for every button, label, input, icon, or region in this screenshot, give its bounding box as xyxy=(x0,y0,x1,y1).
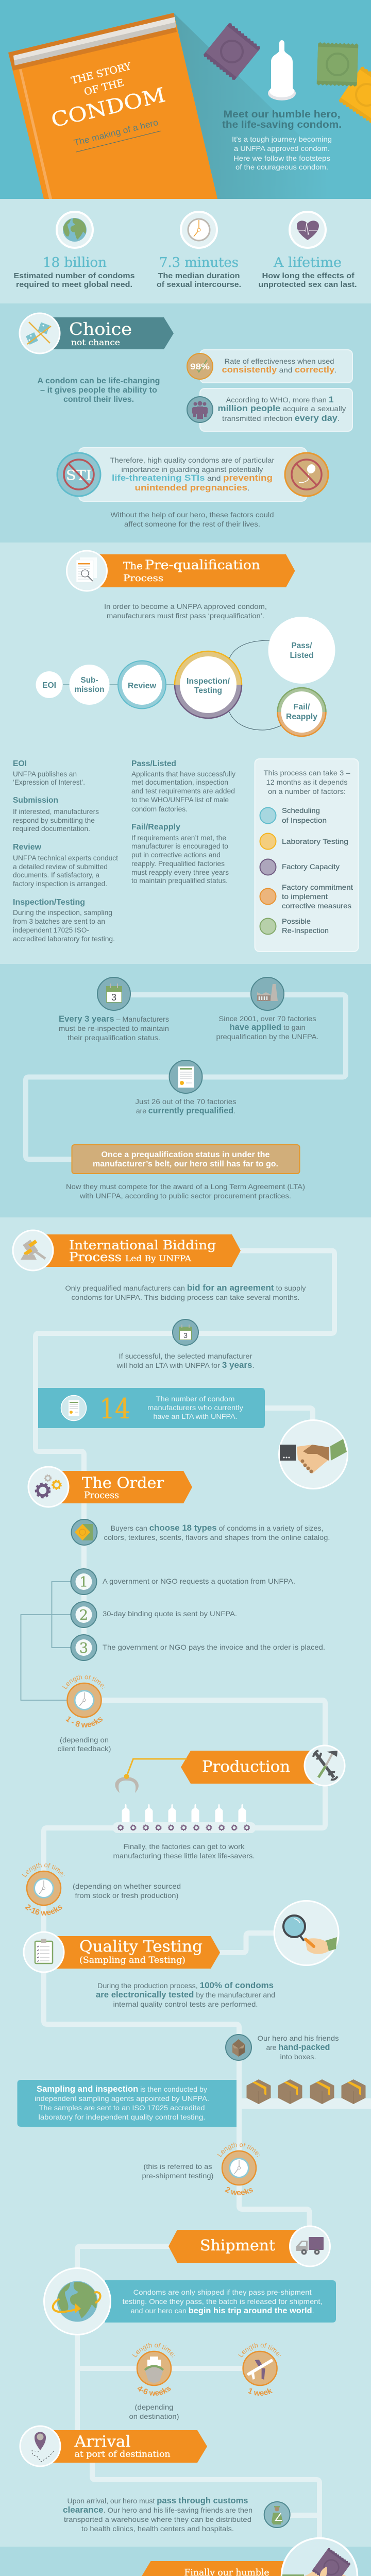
text: customs clearance: to health clinics, health centers and hospitals. xyxy=(81,2524,234,2533)
section background: hero xyxy=(0,0,371,199)
text: hand-packed: into boxes. xyxy=(280,2053,316,2061)
hero intro text: a UNFPA approved condom. xyxy=(234,144,330,152)
text: 3 years LTA: will hold an LTA with UNFPA for 3 years. xyxy=(116,1361,255,1370)
text: definitions left column: documents. If satisfactory, a xyxy=(13,871,99,879)
title: the story of the condom: CONDOM xyxy=(49,83,167,132)
section background: how UNFPA can help xyxy=(0,2547,371,2576)
text: every 3 years: their prequalification status. xyxy=(68,1033,160,1042)
icon: calendar small xyxy=(173,1319,198,1345)
hero intro text: Here we follow the footsteps xyxy=(233,154,330,162)
banner: finally reaches user xyxy=(141,2561,294,2576)
panel: factors legend: 12 months as it depends xyxy=(266,778,347,786)
stat: 18 billion: 18 billion xyxy=(43,255,107,270)
main connector: bidding to order xyxy=(36,1251,334,1638)
text: pre-qualification intro: manufacturers must first pass ‘prequalification’. xyxy=(107,612,264,620)
icon: yellow sachet xyxy=(338,65,371,124)
panel: factors legend: Scheduling xyxy=(282,806,320,815)
process diagram: mission xyxy=(74,685,104,694)
timeline connector: factories xyxy=(26,995,346,1159)
section background: choice xyxy=(0,303,371,543)
text: pre-qualification intro xyxy=(104,602,267,620)
text: every 3 years xyxy=(59,1014,169,1042)
callout: still far to go: manufacturer’s belt, our hero still has far to go. xyxy=(93,1160,278,1168)
icon: condom xyxy=(268,40,296,100)
text: definitions left column xyxy=(13,759,118,943)
icon: open box xyxy=(226,2035,251,2060)
icon: stacked boxes xyxy=(246,2079,366,2104)
banner: choice not chance: Choice xyxy=(69,319,132,339)
card: 1 million people: transmitted infection every day . xyxy=(222,414,340,423)
icon: calendar 3 xyxy=(97,977,130,1010)
text: depending on destination: on destination) xyxy=(129,2412,179,2420)
badge: length of time 2-16 weeks: Length of time: xyxy=(22,1863,65,1877)
panel: factors legend: This process can take 3 – xyxy=(264,769,350,777)
text: definitions left column: required documentation. xyxy=(13,824,90,833)
connector: to magnifier xyxy=(220,1933,276,1953)
text: hand-packed xyxy=(258,2034,339,2061)
panel: factors legend: to implement xyxy=(282,892,328,901)
icon: factory xyxy=(251,977,284,1010)
banner: shipment: Shipment xyxy=(200,2236,275,2254)
text: 3 years LTA: If successful, the selected manufacturer xyxy=(119,1352,252,1360)
badge: length of time 1-8 weeks: Length of time: xyxy=(62,1674,105,1689)
text: stock or fresh: (depending on whether sourced xyxy=(73,1882,181,1890)
stat: 7.3 minutes: The median duration xyxy=(158,272,240,280)
text: since 2001: prequalification by the UNFPA. xyxy=(216,1032,318,1041)
text: factories get to work xyxy=(113,1842,255,1860)
step 3: The government or NGO pays the invoice and the order is placed. xyxy=(103,1643,325,1651)
text: life changing: A condom can be life-changing xyxy=(37,377,160,385)
process diagram: Review xyxy=(128,682,157,690)
stat: 18 billion xyxy=(13,212,135,289)
card: 1 million people: million people acquire a sexually xyxy=(217,404,346,413)
process diagram: Sub- xyxy=(80,676,98,685)
icon: certificate xyxy=(169,1060,202,1093)
icon: globe with arrow xyxy=(44,2268,110,2335)
text: every 3 years: must be re-inspected to maintain xyxy=(59,1024,169,1032)
text: choose 18 types: Buyers can choose 18 types of condoms in a variety of sizes, xyxy=(110,1523,323,1533)
title: the story of the condom xyxy=(49,61,167,152)
banner: the order process: Process xyxy=(84,1490,119,1501)
icon: condom packets xyxy=(71,1519,97,1545)
stat: 7.3 minutes xyxy=(157,212,241,289)
process diagram: Fail/ xyxy=(294,703,310,711)
badge: ship 4-6 weeks: Length of time: xyxy=(132,2343,175,2358)
panel: factors legend: on a number of factors: xyxy=(268,787,346,795)
hero intro text: the life-saving condom. xyxy=(222,120,342,130)
section background: stats xyxy=(0,199,371,303)
text: factories get to work: manufacturing these little latex life-savers. xyxy=(113,1852,255,1860)
text: hand-packed: are hand-packed xyxy=(266,2043,330,2052)
card: STIs and pregnancies: unintended pregnancies . xyxy=(135,483,249,493)
text: definitions left column: Submission xyxy=(13,796,58,805)
conveyor band xyxy=(239,2098,371,2109)
banner: the order process xyxy=(28,1467,192,1507)
text: definitions middle column: reapply. Prequalified factories xyxy=(131,859,225,868)
text: definitions middle column: If requirements aren’t met, the xyxy=(131,834,226,842)
text: long term agreement: with UNFPA, according to public sector procurement practices. xyxy=(79,1192,291,1200)
text: definitions left column: UNFPA technical experts conduct xyxy=(13,854,118,862)
panel: factors legend: Factory commitment xyxy=(282,883,353,891)
hero intro text xyxy=(222,109,342,171)
panel: factors legend: Possible xyxy=(282,917,311,925)
connector: shipment to arrival xyxy=(77,2246,260,2434)
badge: length of time 2-16 weeks: 2-16 weeks xyxy=(25,1904,62,1916)
text: customs clearance: transported a warehouse where they can be distributed xyxy=(64,2515,251,2523)
text: definitions left column: During the inspection, sampling xyxy=(13,908,112,917)
text: since 2001: Since 2001, over 70 factories xyxy=(218,1014,316,1023)
stat: 18 billion: required to meet global need. xyxy=(16,280,132,289)
panel: sampling and inspection: laboratory for independent quality control testing. xyxy=(38,2113,205,2121)
stat: 7.3 minutes: of sexual intercourse. xyxy=(157,280,241,289)
panel: sampling and inspection: independent sampling agents appointed by UNFPA. xyxy=(35,2094,209,2103)
badge: length of time 2 weeks: Length of time: xyxy=(217,2142,260,2157)
text: 3 years LTA xyxy=(116,1352,255,1370)
panel: begin his trip: Condoms are only shipped if they pass pre-shipment xyxy=(133,2288,312,2296)
text: pre-shipment testing: pre-shipment testing) xyxy=(142,2172,213,2180)
card: STIs and pregnancies: life-threatening STIs and preventing xyxy=(112,473,273,483)
banner: quality testing: Quality Testing xyxy=(79,1938,203,1956)
process diagram: Reapply xyxy=(286,713,317,721)
banner: the order process: The Order xyxy=(82,1474,164,1492)
text: definitions middle column: Applicants that have successfully xyxy=(131,770,235,778)
card: 1 million people: According to WHO, more than 1 xyxy=(226,395,334,404)
panel: 14 manufacturers: manufacturers who currently xyxy=(147,1403,243,1412)
text: without the help: affect someone for the rest of their lives. xyxy=(124,520,260,528)
text: definitions middle column: and test requirements are added xyxy=(131,787,235,795)
banner: quality testing: (Sampling and Testing) xyxy=(79,1955,185,1965)
icon: hand with magnifier xyxy=(274,1901,339,1965)
text: definitions middle column: condom factories. xyxy=(131,805,188,813)
stat: a lifetime: A lifetime xyxy=(273,255,342,270)
banner: international bidding xyxy=(13,1230,241,1270)
text: definitions left column: independent 17025 ISO- xyxy=(13,926,89,934)
title: the story of the condom: The making of a hero xyxy=(73,117,159,148)
banner: quality testing xyxy=(24,1932,220,1972)
banner: pre-qualification: The xyxy=(123,560,143,572)
badge: length of time 2-16 weeks xyxy=(22,1863,65,1916)
step 2 xyxy=(71,1602,237,1628)
text: definitions middle column: Pass/Listed xyxy=(131,759,176,768)
process diagram xyxy=(36,617,335,736)
text: definitions left column: accredited laboratory for testing. xyxy=(13,935,115,943)
callout: still far to go: Once a prequalification status in under the xyxy=(101,1150,270,1159)
section background: pre-qualification xyxy=(0,543,371,964)
step 3: 3 xyxy=(79,1640,88,1656)
text: since 2001 xyxy=(216,1014,318,1041)
panel: sampling and inspection: The samples are sent to an ISO 17025 accredited xyxy=(39,2104,205,2112)
card: STIs and pregnancies: Therefore, high quality condoms are of particular xyxy=(110,456,275,464)
text: without the help: Without the help of our hero, these factors could xyxy=(110,511,274,519)
hero intro text: Meet our humble hero, xyxy=(224,109,340,120)
banner: arrival: Arrival xyxy=(74,2433,131,2451)
banner: arrival xyxy=(20,2426,207,2466)
banner: pre-qualification xyxy=(67,551,295,591)
text: just 26: Just 26 out of the 70 factories xyxy=(135,1097,236,1106)
badge: plane 1 week: Length of time: xyxy=(238,2343,281,2358)
card: 98 percent: consistently and correctly . xyxy=(222,365,337,375)
title: the story of the condom: OF THE xyxy=(83,77,125,98)
banner: international bidding: International Bidding xyxy=(69,1238,216,1252)
icon: purple sachet xyxy=(203,22,261,81)
text: definitions left column: from 3 batches are sent to an xyxy=(13,917,105,925)
book cover xyxy=(8,13,217,199)
text: life changing: – it gives people the ability to xyxy=(40,386,157,395)
stat: 7.3 minutes: 7.3 minutes xyxy=(159,255,239,270)
connector: arrival to user xyxy=(92,2460,319,2540)
banner: pre-qualification: Process xyxy=(123,573,163,584)
text: hand-packed: Our hero and his friends xyxy=(258,2034,339,2042)
banner: production xyxy=(181,1745,345,1786)
text: every 3 years: Every 3 years – Manufacturers xyxy=(59,1014,169,1024)
panel: factors legend: of Inspection xyxy=(282,816,327,824)
text: choose 18 types: colors, textures, scents, flavors and shapes from the online catalog. xyxy=(104,1533,330,1541)
hero intro text: of the courageous condom. xyxy=(235,163,328,171)
card: 98 percent xyxy=(187,350,352,383)
icon: customs officer xyxy=(264,2502,290,2528)
banner: shipment xyxy=(168,2226,330,2266)
badge: ship 4-6 weeks xyxy=(132,2343,175,2396)
text: stock or fresh xyxy=(73,1882,181,1900)
icon: robot claw xyxy=(115,1759,187,1793)
step 1 xyxy=(71,1569,295,1595)
text: definitions middle column xyxy=(131,759,235,885)
title: the story of the condom: THE STORY xyxy=(70,61,132,87)
panel: factors legend: Factory Capacity xyxy=(282,862,340,871)
badge: plane 1 week: 1 week xyxy=(247,2388,273,2396)
text: definitions middle column: to the WHO/UNFPA list of male xyxy=(131,795,229,804)
text: bid for an agreement: Only prequalified manufacturers can bid for an agreement to supply xyxy=(65,1283,306,1293)
text: customs clearance: Upon arrival, our hero must pass through customs xyxy=(67,2496,248,2505)
stat: a lifetime: unprotected sex can last. xyxy=(259,280,357,289)
text: client feedback: (depending on xyxy=(60,1736,109,1744)
text: definitions left column: respond by submitting the xyxy=(13,816,95,824)
text: electronically tested xyxy=(96,1981,275,2008)
text: just 26 xyxy=(135,1097,236,1115)
text: long term agreement: Now they must compete for the award of a Long Term Agreement (LTA) xyxy=(66,1182,305,1191)
text: definitions middle column: put in corrective actions and xyxy=(131,851,221,859)
text: definitions left column: Inspection/Testing xyxy=(13,898,85,907)
icon: calendar 3: 3 xyxy=(111,992,116,1003)
panel: factors legend: corrective measures xyxy=(282,902,351,910)
text: definitions middle column: to maintain prequalified status. xyxy=(131,876,228,885)
text: bid for an agreement xyxy=(65,1283,306,1301)
card: 98 percent: 98% xyxy=(190,362,210,371)
panel: factors legend: Re-Inspection xyxy=(282,926,329,935)
callout: still far to go xyxy=(72,1145,300,1174)
connector: to handshake xyxy=(265,1408,313,1422)
card: STIs and pregnancies xyxy=(57,448,328,501)
icon: conveyor belt with condoms xyxy=(113,1804,256,1833)
text: definitions left column: a detailed review of submitted xyxy=(13,862,108,871)
text: definitions left column: factory inspection is arranged. xyxy=(13,879,107,888)
panel: begin his trip xyxy=(105,2280,336,2323)
process diagram: Pass/ xyxy=(292,641,312,650)
badge: length of time 1-8 weeks: 1 - 8 weeks xyxy=(65,1717,103,1727)
text: life changing: control their lives. xyxy=(63,395,134,404)
badge: plane 1 week xyxy=(238,2343,281,2396)
text: customs clearance xyxy=(63,2496,252,2533)
panel: sampling and inspection: Sampling and inspection is then conducted by xyxy=(37,2084,207,2094)
card: 98 percent: Rate of effectiveness when used xyxy=(225,357,334,365)
text: definitions middle column: manufacturer is encouraged to xyxy=(131,842,228,850)
text: since 2001: have applied to gain xyxy=(230,1023,305,1032)
panel: 14 manufacturers: The number of condom xyxy=(156,1395,235,1403)
text: factories get to work: Finally, the factories can get to work xyxy=(124,1842,245,1851)
hero intro text: It’s a tough journey becoming xyxy=(232,135,332,143)
text: choose 18 types xyxy=(104,1523,330,1541)
text: depending on destination xyxy=(129,2403,179,2420)
icon: hand holding sachet xyxy=(281,2538,358,2576)
banner: production: Production xyxy=(202,1758,290,1776)
process diagram: Inspection/ xyxy=(187,677,230,686)
bracket connectors xyxy=(21,1582,71,1700)
text: depending on destination: (depending xyxy=(135,2403,173,2411)
text: client feedback xyxy=(58,1736,111,1753)
banner: arrival: at port of destination xyxy=(75,2449,171,2460)
text: client feedback: client feedback) xyxy=(58,1744,111,1753)
panel: 14 manufacturers: have an LTA with UNFPA. xyxy=(154,1412,237,1420)
stat: 18 billion: Estimated number of condoms xyxy=(13,272,135,280)
card: 1 million people xyxy=(187,388,352,431)
connector: order to production to testing xyxy=(44,1700,325,2231)
process diagram: Listed xyxy=(290,651,313,660)
text: definitions middle column: Fail/Reapply xyxy=(131,823,180,832)
step 2: 2 xyxy=(79,1607,88,1623)
text: long term agreement xyxy=(66,1182,305,1200)
icon: handshake xyxy=(279,1420,347,1489)
panel: factors legend xyxy=(255,759,359,952)
text: bid for an agreement: condoms for UNFPA. This bidding process can take several months. xyxy=(71,1293,300,1301)
banner: pre-qualification: Pre-qualification xyxy=(145,557,260,572)
step 1: A government or NGO requests a quotation from UNFPA. xyxy=(103,1577,295,1585)
panel: begin his trip: testing. Once they pass, the batch is released for shipment, xyxy=(123,2297,323,2306)
panel: begin his trip: and our hero can begin his trip around the world . xyxy=(131,2307,314,2315)
step 1: 1 xyxy=(79,1574,88,1590)
icon: calendar small: 3 xyxy=(183,1331,188,1340)
section background: factory timeline xyxy=(0,964,371,1217)
badge: length of time 1-8 weeks xyxy=(62,1674,105,1727)
banner: choice not chance xyxy=(20,313,174,353)
stat: a lifetime xyxy=(259,212,357,289)
banner: international bidding: Process xyxy=(69,1250,122,1264)
text: stock or fresh: from stock or fresh production) xyxy=(75,1891,178,1900)
panel: 14 manufacturers xyxy=(38,1388,265,1428)
panel: 14 manufacturers: 14 xyxy=(99,1393,130,1425)
card: STIs and pregnancies: importance in guarding against potentially xyxy=(122,465,263,473)
book shadow xyxy=(174,13,330,199)
badge: ship 4-6 weeks: 4-6 weeks xyxy=(137,2386,171,2396)
text: electronically tested: are electronically tested by the manufacturer and xyxy=(96,1990,275,1999)
stat: a lifetime: How long the effects of xyxy=(262,272,355,280)
text: definitions left column: If interested, manufacturers xyxy=(13,807,99,816)
banner: international bidding: Led By UNFPA xyxy=(125,1253,191,1263)
text: definitions left column: EOI xyxy=(13,759,27,768)
text: definitions middle column: met documentation, inspection xyxy=(131,778,228,786)
text: electronically tested: During the production process, 100% of condoms xyxy=(97,1981,274,1990)
process diagram: Testing xyxy=(194,686,222,695)
panel: factors legend: Laboratory Testing xyxy=(282,837,348,845)
step 2: 30-day binding quote is sent by UNFPA. xyxy=(103,1609,237,1618)
badge: length of time 2 weeks: 2 weeks xyxy=(225,2187,253,2196)
text: definitions left column: Review xyxy=(13,843,42,852)
icon: green sachet xyxy=(317,42,358,87)
text: pre-qualification intro: In order to become a UNFPA approved condom, xyxy=(104,602,267,611)
text: pre-shipment testing xyxy=(142,2162,213,2180)
card: STIs and pregnancies: STI xyxy=(66,468,92,483)
text: definitions left column: UNFPA publishes an xyxy=(13,770,77,778)
text: electronically tested: internal quality control tests are performed. xyxy=(113,2000,258,2008)
text: life changing xyxy=(37,377,160,404)
banner: choice not chance: not chance xyxy=(71,337,120,347)
text: definitions left column: ‘Expression of Interest’. xyxy=(13,778,85,786)
text: just 26: are currently prequalified. xyxy=(136,1106,235,1115)
badge: length of time 2 weeks xyxy=(217,2142,260,2196)
text: pre-shipment testing: (this is referred to as xyxy=(143,2162,212,2171)
text: without the help xyxy=(110,511,274,528)
section background: bidding to arrival xyxy=(0,1217,371,2547)
panel: sampling and inspection xyxy=(18,2080,237,2127)
process diagram: EOI xyxy=(42,681,56,690)
text: definitions middle column: must reapply every three years xyxy=(131,868,229,876)
text: customs clearance: clearance. Our hero and his life-saving friends are then xyxy=(63,2505,252,2515)
step 3 xyxy=(71,1635,325,1660)
